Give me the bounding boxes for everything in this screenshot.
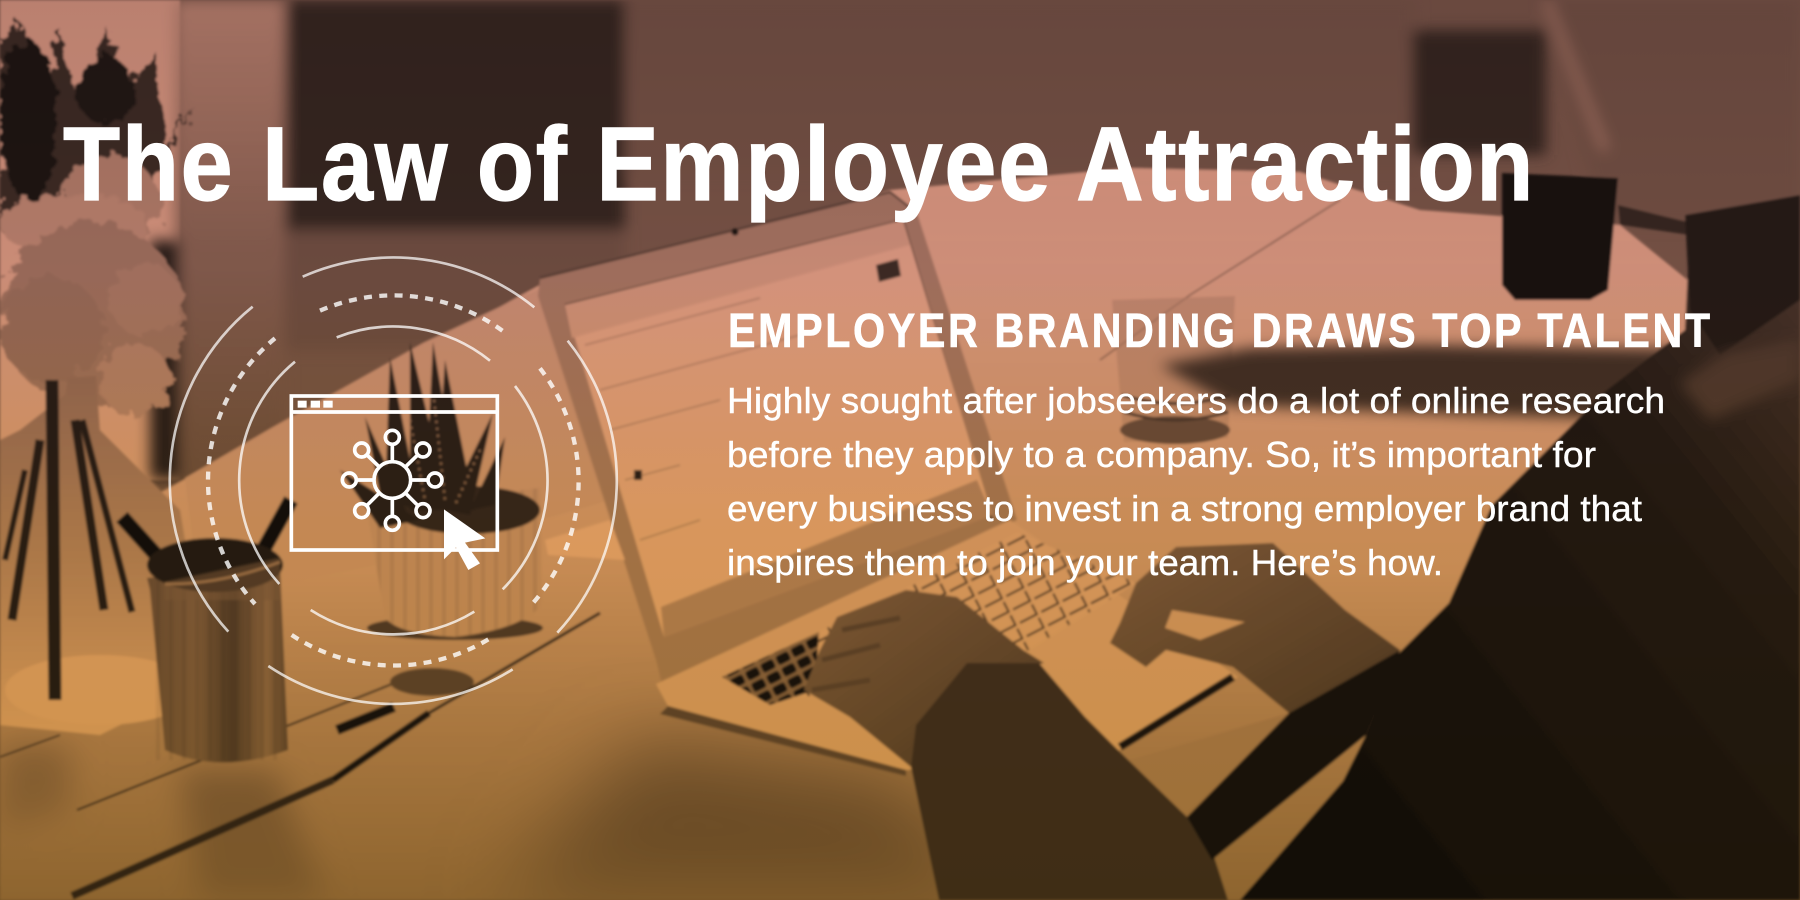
body paragraph: every business to invest in a strong employer brand that bbox=[727, 488, 1642, 529]
subheading: EMPLOYER BRANDING DRAWS TOP TALENT bbox=[728, 304, 1710, 358]
inner solid rings bbox=[239, 327, 548, 634]
bouquet bbox=[0, 20, 195, 416]
hands and sleeve bbox=[804, 590, 1044, 767]
body paragraph: inspires them to join your team. Here’s how. bbox=[727, 542, 1443, 583]
icon: radar rings around browser window bbox=[170, 257, 617, 704]
paper beside pot bbox=[545, 520, 625, 560]
title: The Law of Employee Attraction bbox=[63, 106, 1533, 223]
person body bbox=[1240, 200, 1800, 900]
cursor arrow bbox=[444, 509, 485, 570]
desk shadows bbox=[500, 740, 1000, 900]
body paragraph bbox=[727, 380, 1665, 583]
succulent in ribbed pot bbox=[340, 342, 543, 640]
outer solid rings bbox=[170, 257, 617, 704]
laptop lid bbox=[538, 192, 1017, 684]
network node icon bbox=[342, 430, 442, 530]
laptop base and keyboard bbox=[656, 520, 1238, 770]
blurred back wall, column and window bbox=[150, 0, 1800, 490]
browser window bbox=[291, 396, 497, 550]
glass bbox=[1112, 296, 1235, 442]
body paragraph: Highly sought after jobseekers do a lot of online research bbox=[727, 380, 1665, 421]
dashed rings bbox=[208, 295, 579, 666]
glass vase with stems bbox=[0, 376, 195, 735]
pen cup with pens bbox=[122, 500, 291, 762]
body paragraph: before they apply to a company. So, it’s important for bbox=[727, 434, 1596, 475]
forearm behind laptop bbox=[1160, 345, 1700, 420]
far-right mug and head shadow bbox=[1502, 173, 1618, 300]
desk cracks and planks bbox=[0, 200, 1340, 896]
